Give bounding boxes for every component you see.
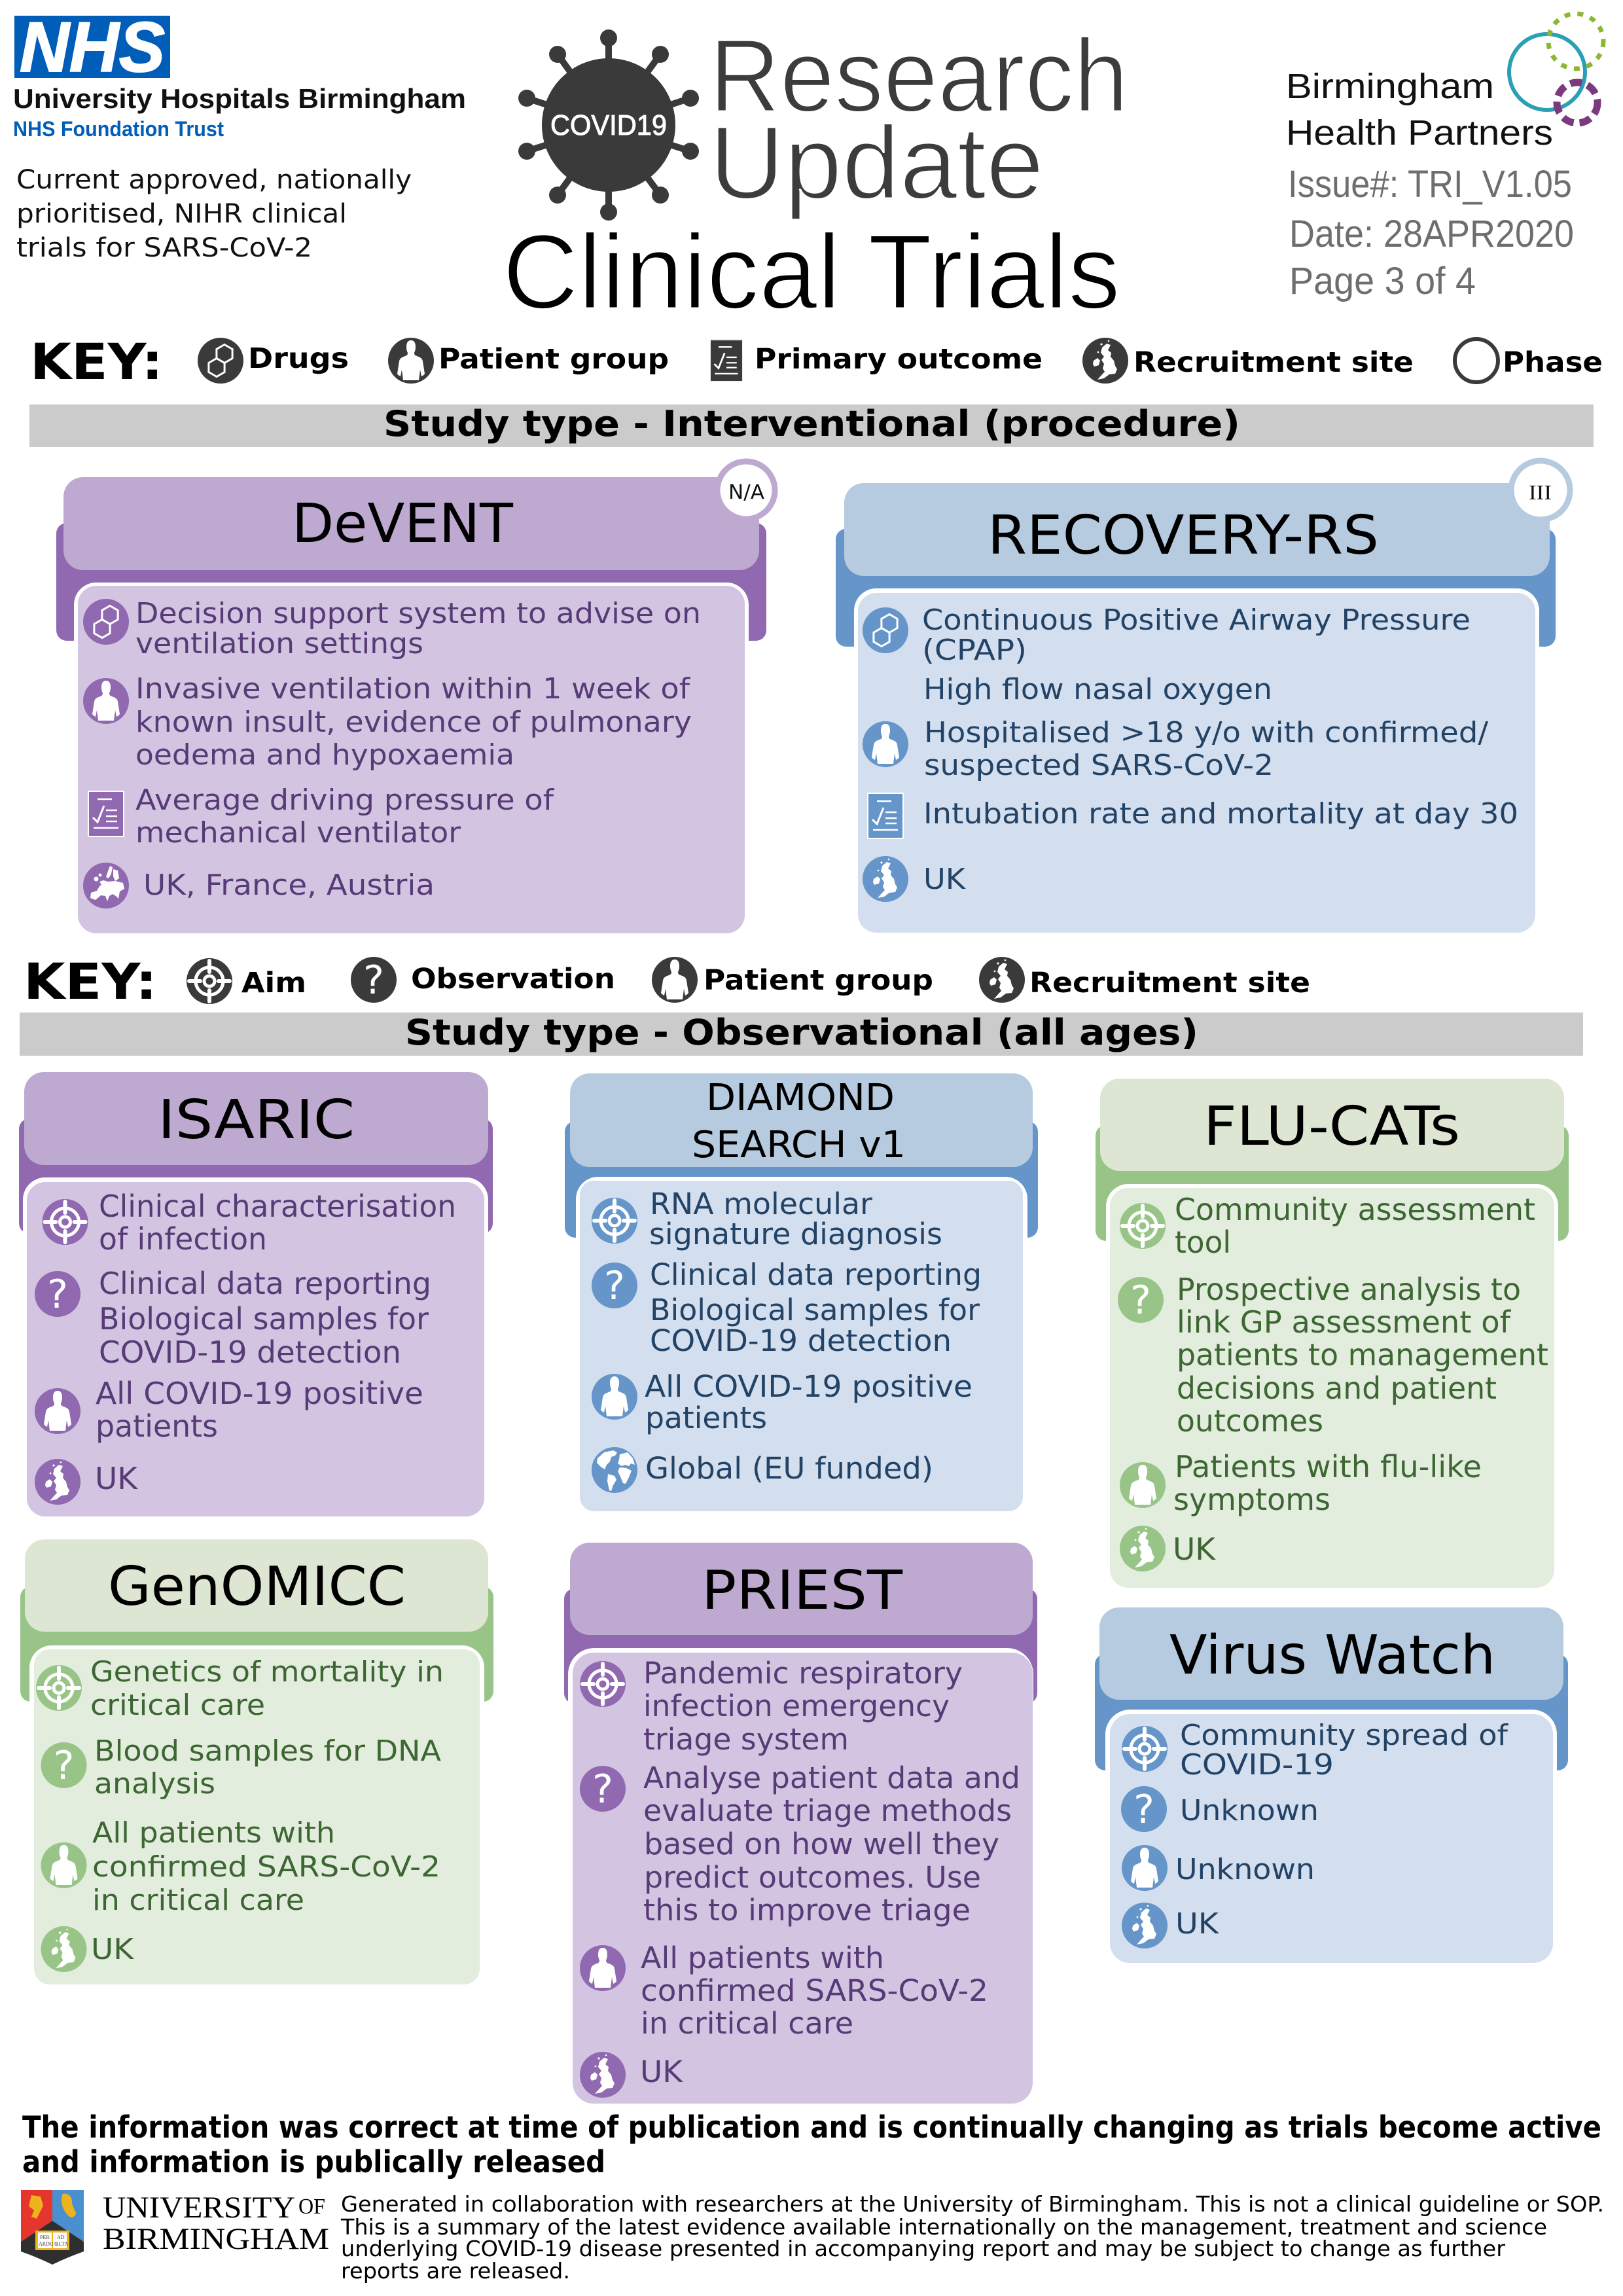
panel: Virus Watch (1095, 1607, 1568, 1963)
text: subtitle (16, 165, 412, 263)
text: FLU-CATs details: patients to management (1177, 1337, 1548, 1372)
text: disclaimer: This is a summary of the latest evidence available internationally on the management, treatment and science (340, 2214, 1547, 2240)
logo: University of Birmingham wordmark: UNIVERSITY (103, 2191, 295, 2225)
icon: Europe (83, 863, 129, 908)
icon: coronavirus with COVID19 label (518, 29, 699, 221)
icon: aim (1120, 1203, 1166, 1249)
text: ISARIC details: Clinical data reporting (99, 1266, 431, 1301)
icon: outcome (88, 791, 124, 836)
text: PRIEST details: infection emergency (643, 1689, 950, 1723)
icon: patient (863, 721, 908, 767)
text: FLU-CATs details: link GP assessment of (1177, 1304, 1512, 1340)
text: disclaimer: reports are released. (341, 2258, 570, 2284)
panel: DIAMOND SEARCH v1: DIAMOND (706, 1077, 895, 1119)
icon: patient (580, 1945, 626, 1991)
text: subtitle: trials for SARS-CoV-2 (16, 233, 312, 263)
text: RECOVERY-RS details: suspected SARS-CoV-2 (924, 749, 1274, 782)
icon: aim (580, 1661, 626, 1707)
text: RECOVERY-RS details (922, 603, 1518, 896)
title: Research Update: Research (709, 18, 1128, 134)
text: ISARIC details: Biological samples for (99, 1301, 429, 1336)
icon: UK (35, 1459, 80, 1505)
logo: University of Birmingham crest: PER (40, 2234, 50, 2240)
icon: observation (41, 1742, 86, 1789)
icon: aim (36, 1665, 82, 1711)
logo: University of Birmingham wordmark: OF (298, 2195, 325, 2219)
text: Virus Watch details: UK (1175, 1907, 1219, 1941)
panel: Virus Watch: Virus Watch (1169, 1624, 1495, 1687)
text: RECOVERY-RS details: High flow nasal oxygen (923, 673, 1272, 706)
heading: Study type - Observational (all ages): Study type - Observational (all ages) (405, 1012, 1198, 1053)
text: GenOMICC details: analysis (94, 1767, 215, 1801)
text: DeVENT details: Average driving pressure of (135, 783, 555, 817)
text: ISARIC details: of infection (99, 1221, 267, 1257)
icon: drug (83, 599, 129, 645)
text: publication notice: and information is publically released (22, 2144, 605, 2179)
text: PRIEST details (640, 1656, 1020, 2089)
text: issue details: Page 3 of 4 (1289, 260, 1476, 302)
text: disclaimer: Generated in collaboration with researchers at the University of Birmingham. This is not a clinical guideline or SOP. (341, 2191, 1604, 2217)
phase badge: N/A: N/A (728, 481, 764, 504)
icon: UK (580, 2052, 626, 2098)
text: PRIEST details: UK (640, 2054, 684, 2089)
text: DeVENT details: ventilation settings (135, 627, 423, 660)
heading: Study type - Observational (all ages) (20, 1012, 1583, 1056)
text: PRIEST details: predict outcomes. Use (644, 1860, 981, 1895)
text: GenOMICC details: confirmed SARS-CoV-2 (92, 1850, 440, 1884)
text: PRIEST details: Analyse patient data and (643, 1761, 1020, 1795)
phase badge: N/A (717, 461, 775, 519)
text: issue details: Issue#: TRI_V1.05 (1288, 163, 1572, 206)
text: GenOMICC details: UK (91, 1933, 134, 1966)
icon: UK (1120, 1526, 1166, 1571)
text: issue details (1288, 163, 1574, 302)
panel: FLU-CATs: FLU-CATs (1204, 1096, 1460, 1158)
panel: PRIEST: PRIEST (702, 1560, 903, 1622)
icon: UK (1122, 1903, 1168, 1948)
icon: observation (1121, 1786, 1167, 1833)
panel: FLU-CATs (1096, 1079, 1569, 1588)
text: DeVENT details: known insult, evidence of pulmonary (135, 706, 692, 739)
key: interventional: Recruitment site (1133, 346, 1414, 379)
key: observational (24, 952, 1310, 1011)
phase badge: III: III (1529, 480, 1552, 504)
icon: observation (580, 1766, 626, 1812)
text: GenOMICC details: All patients with (92, 1816, 335, 1850)
text: disclaimer: underlying COVID-19 disease presented in accompanying report and may be subject to change as further (341, 2236, 1505, 2261)
text: DIAMOND details: Biological samples for (650, 1293, 980, 1327)
text: DIAMOND details: All COVID-19 positive (645, 1369, 972, 1404)
key: observational: Patient group (704, 964, 933, 997)
text: DeVENT details: Decision support system to advise on (135, 597, 701, 630)
text: ISARIC details (95, 1189, 456, 1496)
key: observational: Observation (411, 963, 615, 996)
text: FLU-CATs details (1173, 1192, 1548, 1567)
title: Research Update: Update (709, 105, 1044, 221)
text: Virus Watch details: Unknown (1175, 1853, 1315, 1886)
heading: Study type - Interventional (procedure): Study type - Interventional (procedure) (383, 403, 1240, 444)
text: DIAMOND details: Clinical data reporting (650, 1257, 982, 1292)
icon: patient (35, 1388, 80, 1434)
text: PRIEST details: this to improve triage (643, 1893, 971, 1928)
text: DeVENT details: mechanical ventilator (135, 816, 461, 850)
logo: University of Birmingham crest: AD (57, 2234, 65, 2240)
text: FLU-CATs details: outcomes (1177, 1403, 1323, 1439)
logo: University of Birmingham crest (21, 2190, 84, 2265)
text: DIAMOND details: signature diagnosis (649, 1217, 942, 1251)
icon: patient (592, 1374, 637, 1420)
logo: University of Birmingham wordmark (103, 2191, 329, 2256)
key: observational: KEY: (24, 952, 157, 1011)
logo: NHS: NHS (20, 7, 165, 86)
icon: UK (41, 1926, 86, 1972)
text: PRIEST details: confirmed SARS-CoV-2 (641, 1973, 988, 2008)
text: Virus Watch details: Community spread of (1180, 1719, 1509, 1752)
text: PRIEST details: in critical care (641, 2006, 853, 2041)
icon: patient (1120, 1462, 1166, 1508)
text: University Hospitals Birmingham: University Hospitals Birmingham (13, 83, 466, 114)
text: PRIEST details: based on how well they (644, 1827, 999, 1861)
icon: patient (83, 678, 129, 724)
logo: University of Birmingham crest: ARDUA (39, 2241, 58, 2247)
icon: drug (863, 607, 908, 653)
logo: University of Birmingham crest: ALTA (55, 2241, 68, 2247)
logo: Birmingham Health Partners: Health Partners (1286, 113, 1553, 152)
text: FLU-CATs details: Community assessment (1175, 1192, 1535, 1227)
text: FLU-CATs details: symptoms (1173, 1482, 1330, 1517)
key: interventional (30, 332, 1603, 391)
icon: UK (863, 856, 908, 902)
icon: aim (1122, 1726, 1168, 1772)
text: RECOVERY-RS details: Intubation rate and mortality at day 30 (923, 797, 1518, 831)
text: GenOMICC details: in critical care (92, 1884, 304, 1917)
text: RECOVERY-RS details: Continuous Positive Airway Pressure (922, 603, 1471, 637)
key: observational: Aim (241, 967, 306, 999)
panel: ISARIC: ISARIC (158, 1089, 355, 1151)
text: FLU-CATs details: UK (1173, 1532, 1217, 1567)
text: GenOMICC details: critical care (90, 1689, 265, 1722)
icon: patient (41, 1842, 86, 1888)
text: subtitle: prioritised, NIHR clinical (16, 199, 347, 229)
panel: GenOMICC (20, 1539, 493, 1984)
icon: observation (592, 1263, 637, 1309)
text: RECOVERY-RS details: UK (923, 863, 966, 896)
icon: globe (592, 1447, 637, 1493)
text: FLU-CATs details: Prospective analysis to (1177, 1272, 1521, 1307)
text: GenOMICC details: Blood samples for DNA (94, 1734, 441, 1768)
panel: GenOMICC: GenOMICC (108, 1556, 406, 1618)
icon: aim (592, 1198, 637, 1244)
title: Clinical Trials: Clinical Trials (503, 213, 1120, 331)
key: interventional: Phase (1503, 346, 1603, 379)
text: RECOVERY-RS details: Hospitalised >18 y/o with confirmed/ (924, 716, 1488, 749)
text: PRIEST details: Pandemic respiratory (643, 1656, 963, 1691)
panel: ISARIC (19, 1072, 493, 1516)
text: publication notice (22, 2109, 1601, 2179)
text: ISARIC details: UK (95, 1461, 139, 1496)
title: Research Update (709, 18, 1128, 221)
text: PRIEST details: evaluate triage methods (643, 1793, 1012, 1828)
panel: RECOVERY-RS: RECOVERY-RS (988, 505, 1379, 567)
text: FLU-CATs details: decisions and patient (1177, 1371, 1497, 1406)
key: observational: Recruitment site (1029, 967, 1310, 999)
panel: RECOVERY-RS (836, 461, 1570, 933)
text: subtitle: Current approved, nationally (16, 165, 412, 195)
key: interventional: Patient group (438, 343, 669, 376)
icon: patient (1122, 1845, 1168, 1891)
key: interventional: Primary outcome (755, 343, 1043, 376)
panel: DIAMOND SEARCH v1: SEARCH v1 (692, 1124, 906, 1166)
text: DIAMOND details: Global (EU funded) (645, 1451, 933, 1486)
panel: DIAMOND SEARCH v1 (565, 1073, 1038, 1511)
text: DIAMOND details: RNA molecular (650, 1187, 872, 1221)
logo: Birmingham Health Partners: Birmingham (1286, 67, 1494, 106)
logo: University of Birmingham wordmark: BIRMINGHAM (103, 2222, 329, 2256)
text: GenOMICC details (90, 1655, 444, 1966)
text: DIAMOND details: patients (645, 1401, 767, 1435)
text: Virus Watch details: Unknown (1180, 1794, 1319, 1827)
icon: observation (35, 1271, 80, 1318)
heading: Study type - Interventional (procedure) (29, 403, 1594, 447)
panel: DeVENT: DeVENT (292, 493, 514, 555)
text: RECOVERY-RS details: (CPAP) (922, 634, 1027, 667)
panel: DeVENT (56, 461, 775, 933)
text: ISARIC details: All COVID-19 positive (96, 1376, 423, 1411)
text: DeVENT details: oedema and hypoxaemia (135, 738, 514, 772)
text: GenOMICC details: Genetics of mortality in (90, 1655, 444, 1689)
text: disclaimer (340, 2191, 1604, 2284)
text: FLU-CATs details: tool (1175, 1225, 1231, 1260)
text: PRIEST details: triage system (643, 1722, 849, 1757)
text: ISARIC details: Clinical characterisation (99, 1189, 456, 1224)
key: interventional: KEY: (30, 332, 163, 391)
text: FLU-CATs details: Patients with flu-like (1175, 1449, 1482, 1484)
text: DeVENT details (135, 597, 701, 902)
text: ISARIC details: patients (96, 1408, 218, 1444)
text: DeVENT details: UK, France, Austria (143, 869, 435, 902)
text: DIAMOND details: COVID-19 detection (650, 1323, 952, 1358)
text: ISARIC details: COVID-19 detection (99, 1335, 401, 1370)
text: Virus Watch details (1175, 1719, 1509, 1941)
text: DIAMOND details (645, 1187, 982, 1486)
logo: Birmingham Health Partners (1286, 14, 1603, 152)
text: Virus Watch details: COVID-19 (1180, 1748, 1334, 1782)
key: interventional: Drugs (248, 342, 349, 375)
icon: outcome (868, 793, 903, 838)
icon: observation (1118, 1277, 1164, 1323)
text: PRIEST details: All patients with (641, 1941, 884, 1975)
icon: aim (42, 1199, 88, 1245)
panel: PRIEST (564, 1543, 1037, 2104)
text: NHS Foundation Trust: NHS Foundation Trust (13, 117, 224, 141)
phase badge: III (1511, 461, 1570, 520)
text: DeVENT details: Invasive ventilation within 1 week of (135, 672, 691, 706)
icon: coronavirus with COVID19 label: COVID19 (550, 109, 667, 141)
text: issue details: Date: 28APR2020 (1289, 213, 1574, 255)
